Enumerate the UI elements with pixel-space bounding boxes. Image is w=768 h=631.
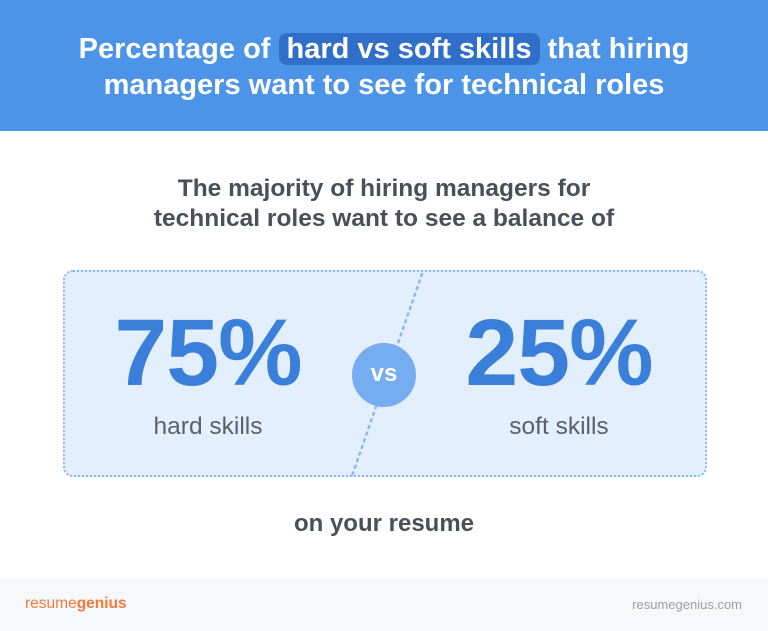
stat: soft skills: soft skills [509, 413, 609, 440]
url: resumegenius.com [632, 597, 742, 612]
stat: hard skills: 75% [114, 300, 302, 406]
title: managers want to see for technical roles [104, 69, 664, 101]
vs badge: vs [371, 360, 397, 387]
subtitle [154, 175, 614, 232]
title [79, 33, 689, 101]
logo: resumegenius [25, 595, 127, 612]
comparison panel [63, 270, 707, 477]
subtitle: technical roles want to see a balance of [154, 205, 614, 232]
title: Percentage of hard vs soft skills that hiring [79, 33, 689, 65]
divider line [351, 272, 424, 476]
footer [0, 579, 768, 631]
stat: soft skills: 25% [465, 300, 653, 406]
closing text: on your resume [294, 510, 474, 537]
vs badge [352, 343, 416, 407]
stat: hard skills: hard skills [154, 413, 262, 440]
header banner [0, 0, 768, 131]
subtitle: The majority of hiring managers for [178, 175, 590, 202]
